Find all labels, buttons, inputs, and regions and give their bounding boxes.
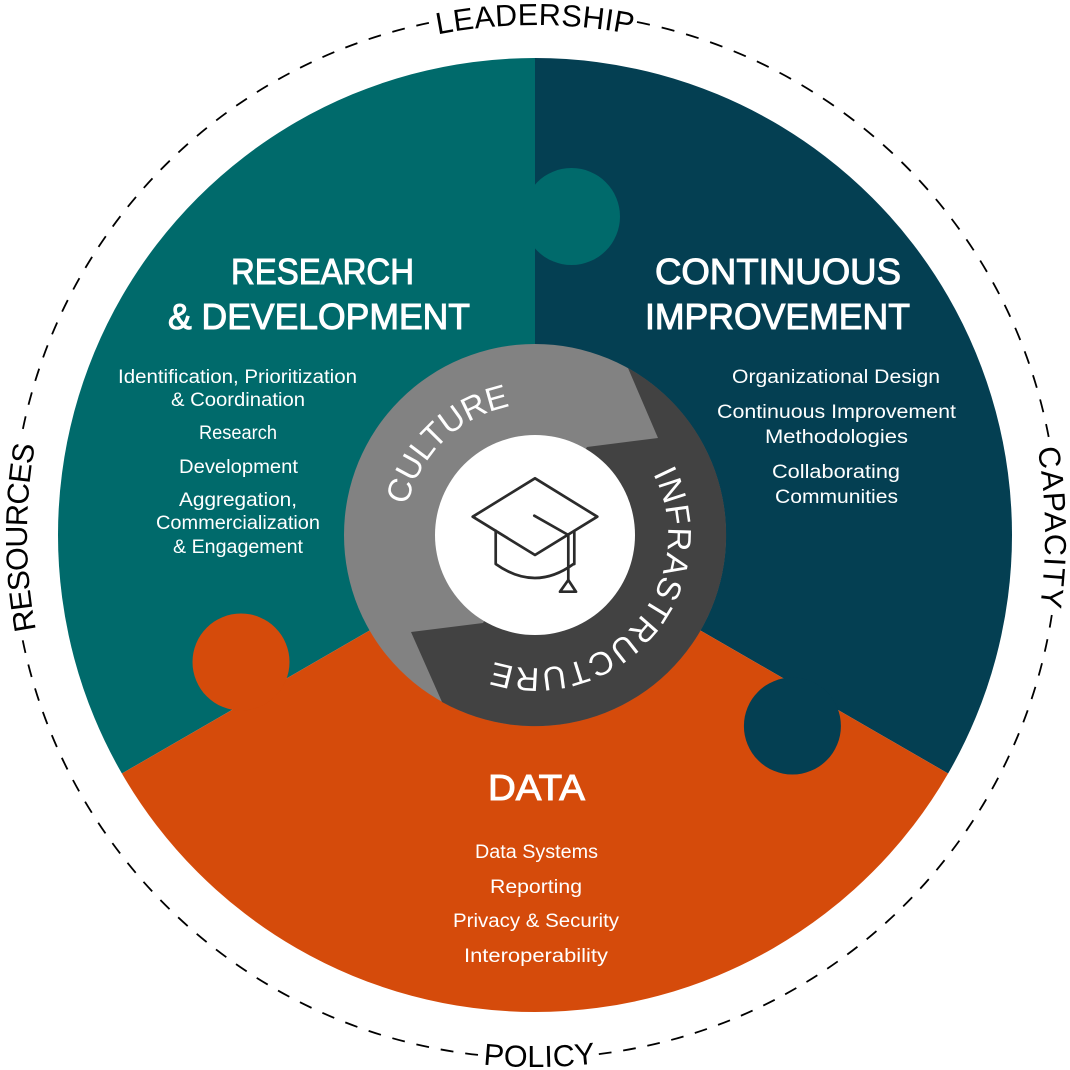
infrastructure ring segment: [411, 368, 726, 726]
label: infrastructure: INFRASTRUCTURE: [490, 466, 691, 691]
panel: data: [122, 535, 948, 1012]
heading: continuous improvement: IMPROVEMENT: [645, 296, 910, 337]
list: continuous improvement items: Communities: [775, 487, 898, 508]
navy puzzle knob: [744, 678, 841, 774]
heading: data: DATA: [488, 767, 585, 808]
culture ring segment: [344, 344, 726, 726]
list: data items: Privacy & Security: [453, 911, 620, 932]
white center disc: [435, 435, 635, 635]
list: research and development items: & Engagement: [173, 537, 304, 558]
list: data items: Data Systems: [475, 842, 598, 863]
list: continuous improvement items: Continuous Improvement: [717, 402, 957, 423]
list: research and development items: Development: [179, 457, 299, 478]
list: research and development items: Commercialization: [156, 513, 320, 534]
orange puzzle knob: [192, 614, 290, 710]
list: research and development items: Identification, Prioritization: [118, 367, 357, 388]
list: continuous improvement items: Organizational Design: [732, 367, 940, 388]
heading: continuous improvement: CONTINUOUS: [655, 251, 901, 292]
list: data items: Reporting: [490, 877, 582, 898]
heading: research and development: & DEVELOPMENT: [168, 296, 470, 337]
teal puzzle segment: [58, 58, 535, 774]
list: research and development items: [118, 367, 357, 558]
orange puzzle segment: [122, 535, 948, 1012]
list: continuous improvement items: [717, 367, 957, 508]
panel: continuous improvement: [523, 58, 1012, 774]
list: data items: [453, 842, 620, 967]
label: culture: CULTURE: [388, 384, 509, 501]
list: continuous improvement items: Collaborating: [772, 462, 900, 483]
list: research and development items: Research: [199, 423, 277, 444]
list: research and development items: & Coordination: [171, 390, 305, 411]
navy puzzle segment: [535, 58, 1012, 774]
heading: research and development: [168, 251, 470, 337]
list: research and development items: Aggregation,: [179, 490, 297, 511]
heading: continuous improvement: [645, 251, 910, 337]
center hub: [344, 344, 726, 726]
list: continuous improvement items: Methodologies: [765, 427, 908, 448]
panel: research and development: [58, 58, 535, 774]
list: data items: Interoperability: [464, 946, 609, 967]
teal puzzle knob: [523, 168, 620, 265]
heading: research and development: RESEARCH: [231, 251, 414, 292]
label: resources: RESOURCES: [6, 444, 36, 631]
icon: graduation cap: [473, 478, 597, 592]
